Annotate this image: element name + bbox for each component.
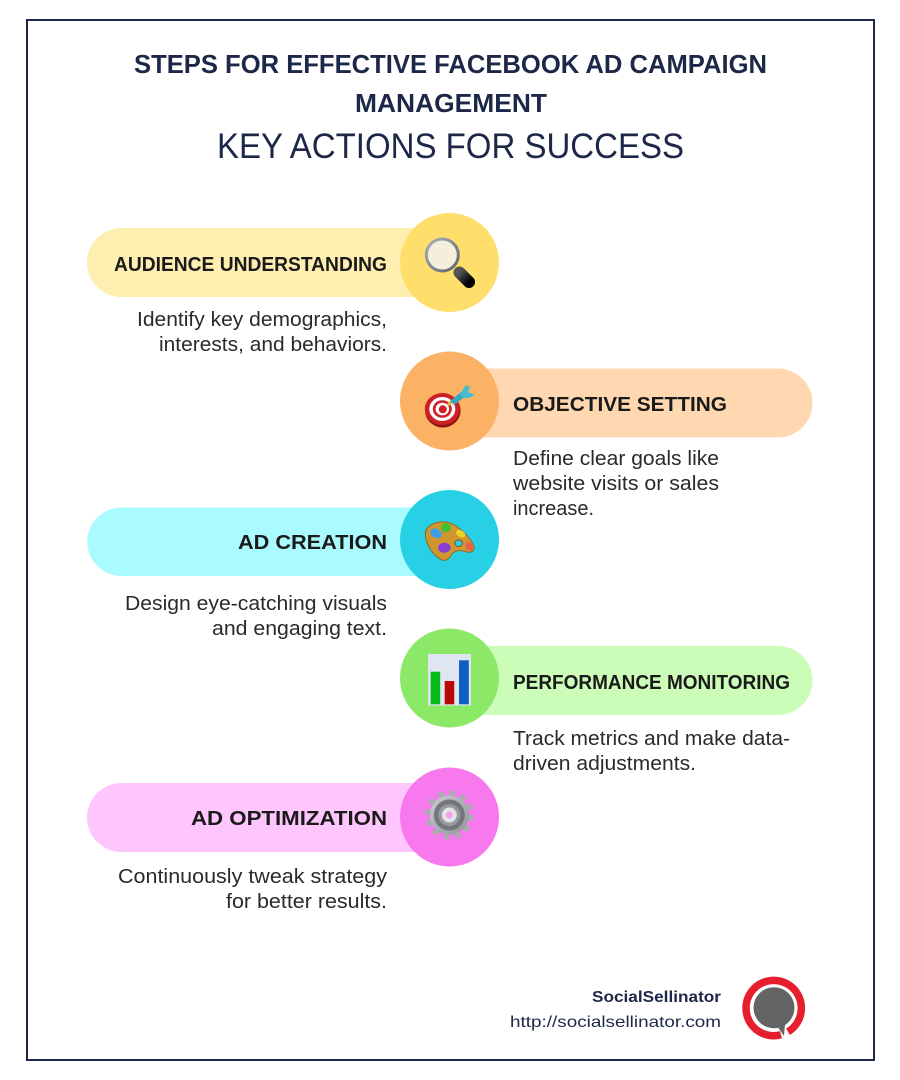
- text: performance monitoring: driven adjustments.: [513, 753, 696, 775]
- heading: ad optimization: AD OPTIMIZATION: [191, 808, 387, 830]
- icon: bar chart: [428, 654, 471, 706]
- pill: objective setting: [460, 368, 813, 438]
- title: [134, 49, 767, 118]
- text: objective setting: website visits or sales: [512, 473, 719, 495]
- icon: gear: [428, 794, 470, 836]
- text: objective setting: [512, 448, 719, 520]
- text: audience understanding: Identify key demographics,: [137, 309, 387, 331]
- icon: target with dart: [425, 385, 475, 428]
- heading: objective setting: OBJECTIVE SETTING: [513, 394, 727, 416]
- icon: paint palette: [425, 522, 475, 560]
- text: objective setting: Define clear goals like: [513, 448, 719, 470]
- text: performance monitoring: [513, 728, 790, 775]
- text: objective setting: increase.: [513, 498, 594, 520]
- title: MANAGEMENT: [355, 88, 547, 118]
- heading: ad creation: AD CREATION: [238, 532, 387, 554]
- text: ad creation: [125, 593, 387, 640]
- subtitle: KEY ACTIONS FOR SUCCESS: [217, 127, 684, 166]
- text: audience understanding: interests, and behaviors.: [159, 334, 387, 356]
- step 1: audience understanding: [87, 213, 499, 356]
- badge circle: audience understanding: [400, 213, 499, 312]
- step 3: ad creation: [87, 490, 499, 640]
- title: STEPS FOR EFFECTIVE FACEBOOK AD CAMPAIGN: [134, 49, 767, 79]
- text: ad creation: Design eye-catching visuals: [125, 593, 387, 615]
- logo: [746, 980, 801, 1036]
- badge circle: objective setting: [400, 352, 499, 450]
- badge circle: ad creation: [400, 490, 499, 589]
- pill: ad optimization: [87, 783, 440, 852]
- step 5: ad optimization: [87, 768, 499, 913]
- badge circle: performance monitoring: [400, 628, 499, 728]
- pill: audience understanding: [87, 228, 440, 297]
- step 2: objective setting: [400, 352, 813, 520]
- text: audience understanding: [137, 309, 387, 356]
- badge circle: ad optimization: [400, 768, 499, 866]
- text: performance monitoring: Track metrics and make data-: [513, 728, 790, 750]
- pill: ad creation: [87, 508, 440, 576]
- icon: magnifying glass: [426, 239, 469, 282]
- step 4: performance monitoring: [400, 628, 813, 775]
- heading: performance monitoring: PERFORMANCE MONITORING: [513, 672, 790, 694]
- pill: performance monitoring: [460, 646, 813, 715]
- text: ad creation: and engaging text.: [212, 618, 387, 640]
- text: ad optimization: Continuously tweak strategy: [118, 866, 387, 888]
- footer url: http://socialsellinator.com: [510, 1014, 721, 1031]
- footer brand name: SocialSellinator: [592, 989, 721, 1006]
- text: ad optimization: for better results.: [226, 891, 387, 913]
- heading: audience understanding: AUDIENCE UNDERSTANDING: [114, 254, 387, 276]
- text: ad optimization: [118, 866, 387, 913]
